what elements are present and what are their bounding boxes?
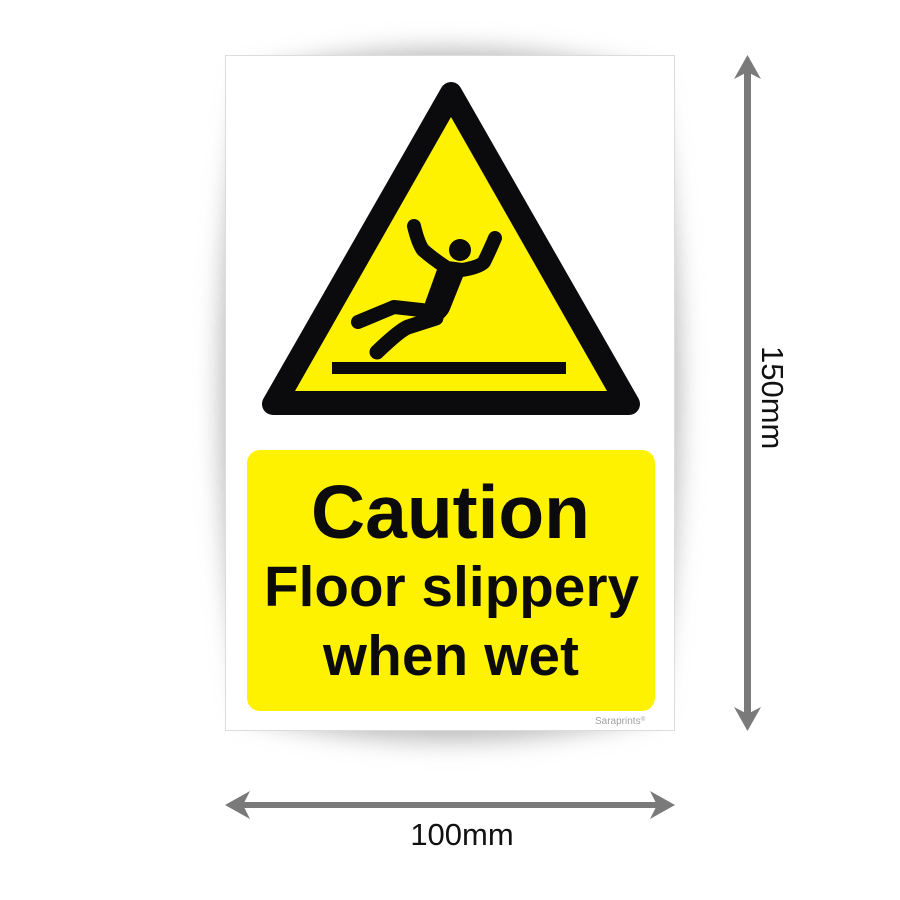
- message line one: Floor slippery: [264, 555, 640, 618]
- figure lower leg: [377, 318, 436, 352]
- triangle yellow field: [295, 117, 607, 391]
- floor bar: [332, 362, 566, 374]
- brand mark: ®: [641, 715, 646, 723]
- figure upper leg: [358, 307, 430, 322]
- arrow: height dimension: [734, 55, 761, 731]
- warning triangle: [273, 93, 629, 404]
- card drop shadow: [220, 48, 680, 742]
- arrow: width dimension: [225, 791, 675, 819]
- figure arms: [414, 226, 495, 270]
- figure head: [449, 239, 471, 261]
- height label: 150mm: [755, 346, 790, 449]
- brand mark: Saraprints: [595, 716, 641, 727]
- caution heading: Caution: [311, 470, 590, 554]
- message line two: when wet: [322, 624, 579, 687]
- width label: 100mm: [410, 817, 514, 852]
- sign card: [226, 56, 674, 730]
- caution text panel: [247, 450, 655, 711]
- icon: slipping figure: [358, 226, 495, 352]
- figure torso: [426, 267, 463, 323]
